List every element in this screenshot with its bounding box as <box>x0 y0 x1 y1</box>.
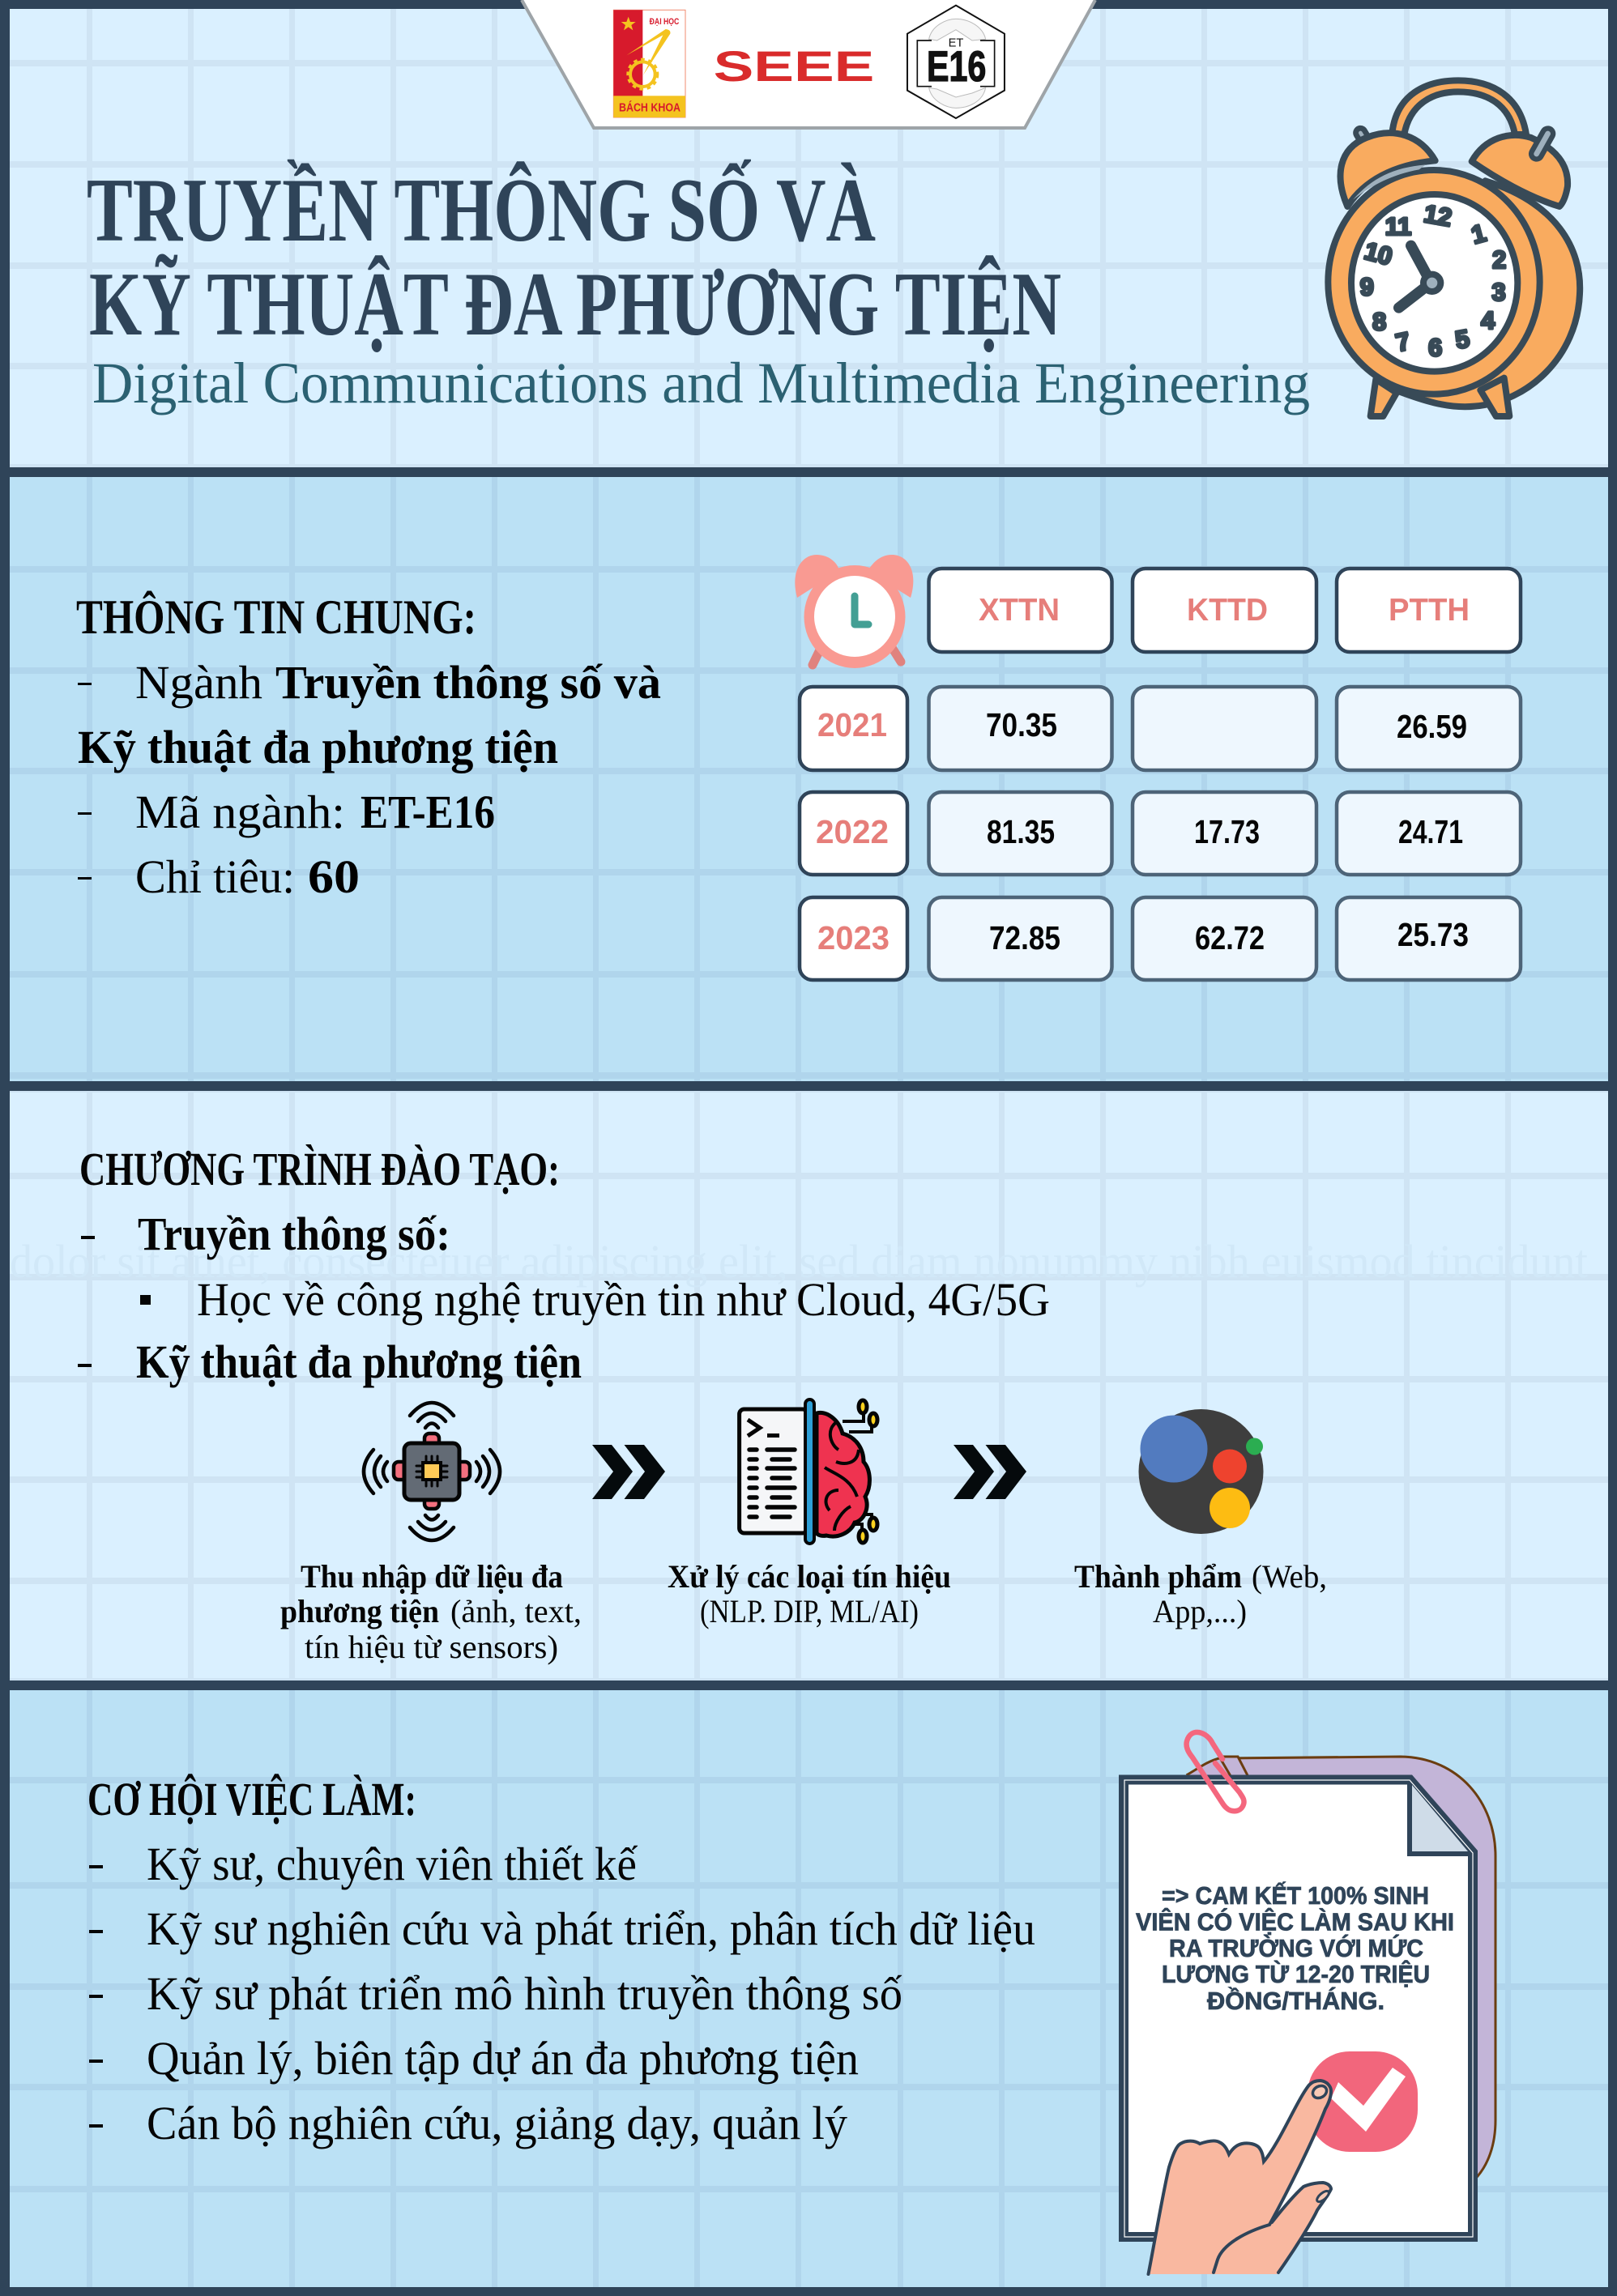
icon: SEEE logo: SEEE <box>714 43 874 91</box>
title: TRUYỀN THÔNG SỐ VÀ <box>87 159 876 261</box>
caption: signal processing <box>668 1558 951 1629</box>
panel: header background <box>10 9 1608 467</box>
icon: alarm clock: 1 <box>1469 219 1489 249</box>
panel: training program background <box>10 1091 1608 1680</box>
table: admission scores: XTTN <box>979 593 1060 628</box>
title: KỸ THUẬT ĐA PHƯƠNG TIỆN <box>89 253 1061 355</box>
text block: general information: Truyền thông số và <box>275 656 661 709</box>
table: admission scores: PTTH <box>1389 593 1470 628</box>
commitment text: => CAM KẾT 100% SINH <box>1162 1881 1429 1910</box>
text block: career opportunities <box>87 1773 1035 2149</box>
text block: career opportunities: Quản lý, biên tập dự án đa phương tiện <box>147 2032 859 2085</box>
caption: data collection: Thu nhập dữ liệu đa <box>301 1558 563 1595</box>
caption: signal processing: Xử lý các loại tín hiệu <box>668 1558 951 1595</box>
icon: small alarm clock <box>795 555 913 668</box>
icon: pointing hand <box>1149 2081 1331 2274</box>
text block: general information: THÔNG TIN CHUNG: <box>76 590 476 644</box>
icon: alarm clock: 9 <box>1360 273 1374 300</box>
table: admission scores <box>800 569 1521 980</box>
table: admission scores: 62.72 <box>1195 919 1265 956</box>
icon: alarm clock: 3 <box>1491 279 1506 306</box>
caption: final product <box>1074 1558 1327 1629</box>
caption: final product: Thành phẩm <box>1074 1558 1242 1595</box>
table: admission scores: 2022 <box>816 813 889 850</box>
icon: alarm clock: 4 <box>1481 307 1495 334</box>
text block: training program: Kỹ thuật đa phương tiện <box>136 1335 582 1388</box>
icon: alarm clock: 10 <box>1362 237 1395 270</box>
icon: terminal and brain <box>740 1399 877 1544</box>
caption: final product: App,...) <box>1153 1593 1247 1629</box>
callout: commitment note <box>1119 1732 1495 2274</box>
commitment text: ĐỒNG/THÁNG. <box>1207 1986 1384 2015</box>
paperclip <box>1187 1732 1244 1811</box>
arrow: double chevron 2 <box>954 1445 1026 1499</box>
text block: career opportunities: Kỹ sư nghiên cứu và phát triển, phân tích dữ liệu <box>147 1902 1035 1955</box>
caption: data collection: tín hiệu từ sensors) <box>305 1629 558 1665</box>
table: admission scores: 70.35 <box>986 706 1057 743</box>
icon: alarm clock: 11 <box>1385 213 1411 241</box>
icon: Bach Khoa logo <box>613 10 685 117</box>
table: admission scores: 25.73 <box>1397 916 1469 953</box>
text block: general information: Chỉ tiêu: <box>135 850 295 903</box>
text block: training program: CHƯƠNG TRÌNH ĐÀO TẠO: <box>79 1143 560 1195</box>
commitment text: LƯƠNG TỪ 12-20 TRIỆU <box>1162 1959 1430 1988</box>
paper sheet <box>1119 1775 1478 2242</box>
text block: career opportunities: Kỹ sư phát triển mô hình truyền thông số <box>147 1967 902 2020</box>
purple back sheet <box>1188 1757 1495 2176</box>
text block: career opportunities: Cán bộ nghiên cứu, giảng dạy, quản lý <box>147 2097 847 2149</box>
table: admission scores: 17.73 <box>1194 813 1260 850</box>
text block: training program: Truyền thông số: <box>138 1208 450 1260</box>
caption: data collection: phương tiện <box>280 1593 439 1629</box>
icon: assistant dots <box>1139 1409 1264 1534</box>
table: admission scores: 2023 <box>817 919 890 956</box>
text block: general information: Ngành <box>135 656 262 709</box>
icon: alarm clock: 6 <box>1428 334 1442 361</box>
icon: alarm clock <box>1328 80 1580 416</box>
icon: sensor chip <box>364 1403 500 1540</box>
title <box>87 159 1061 355</box>
icon: E16 badge: ET <box>949 36 963 49</box>
text block: general information <box>76 590 661 903</box>
commitment text: RA TRƯỜNG VỚI MỨC <box>1169 1933 1423 1962</box>
subtitle: Digital Communications and Multimedia Engineering <box>92 351 1310 415</box>
icon: check badge <box>1308 2051 1418 2152</box>
table: admission scores: 26.59 <box>1397 708 1467 745</box>
icon: E16 badge <box>907 6 1005 118</box>
table: admission scores: 81.35 <box>987 813 1055 850</box>
icon: E16 badge: E16 <box>927 43 986 91</box>
icon: alarm clock: 5 <box>1453 325 1472 355</box>
icon: alarm clock: 12 <box>1422 200 1454 232</box>
table: admission scores: 2021 <box>817 706 887 743</box>
ghost placeholder text: dolor sit amet, consectetuer adipiscing elit, sed diam nonummy nibh euismod tincidunt <box>10 1235 1588 1288</box>
caption: final product: (Web, <box>1252 1558 1327 1595</box>
icon: alarm clock: 2 <box>1492 246 1506 274</box>
text block: career opportunities: Kỹ sư, chuyên viên thiết kế <box>147 1838 638 1890</box>
table: admission scores: 72.85 <box>989 919 1060 956</box>
text block: general information: Mã ngành: <box>135 786 345 838</box>
caption: signal processing: (NLP. DIP, ML/AI) <box>700 1593 919 1629</box>
text block: training program: Học về công nghệ truyền tin như Cloud, 4G/5G <box>197 1273 1050 1326</box>
table: admission scores: KTTD <box>1187 593 1268 628</box>
table: admission scores: 24.71 <box>1398 813 1463 850</box>
icon: alarm clock: 8 <box>1372 309 1386 336</box>
panel: general information background <box>10 477 1608 1081</box>
text block: general information: ET-E16 <box>361 786 495 838</box>
arrow: double chevron 1 <box>592 1445 665 1499</box>
caption: data collection <box>280 1558 582 1665</box>
text block: career opportunities: CƠ HỘI VIỆC LÀM: <box>87 1773 416 1825</box>
text block: training program <box>78 1143 1050 1388</box>
commitment text: VIÊN CÓ VIỆC LÀM SAU KHI <box>1136 1906 1454 1936</box>
caption: data collection: (ảnh, text, <box>450 1593 582 1629</box>
panel: career opportunities background <box>10 1690 1608 2287</box>
icon: Bach Khoa logo: ĐẠI HỌC <box>650 17 680 27</box>
text block: general information: 60 <box>308 850 360 903</box>
icon: alarm clock: 7 <box>1393 327 1413 357</box>
panel: logo plate <box>522 0 1095 128</box>
commitment text <box>1136 1881 1454 2015</box>
icon: Bach Khoa logo: BÁCH KHOA <box>619 100 681 114</box>
tape <box>1219 1757 1250 1780</box>
text block: general information: Kỹ thuật đa phương tiện <box>78 721 558 773</box>
